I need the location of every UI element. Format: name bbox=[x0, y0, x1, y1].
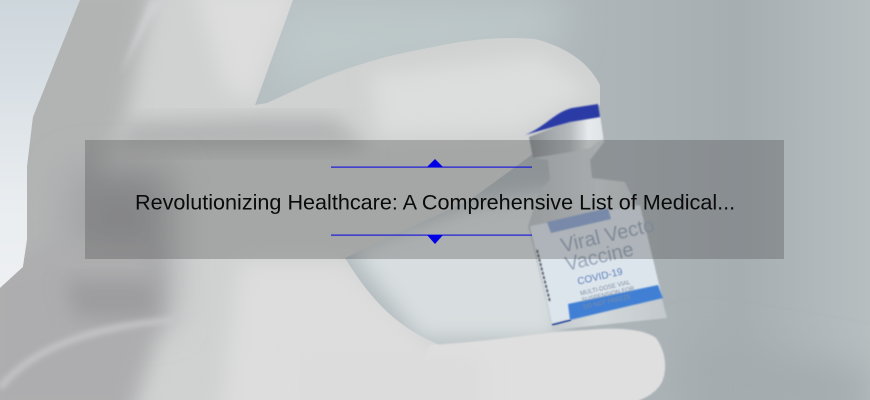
lower palm dark blob bbox=[65, 280, 155, 318]
vial blue cap bbox=[525, 104, 600, 135]
vial glass body bbox=[528, 118, 667, 330]
thumb bbox=[400, 329, 665, 400]
glove fold bbox=[0, 320, 180, 388]
knuckle shadow bbox=[110, 118, 370, 150]
label bottom blue line bbox=[552, 320, 571, 325]
outer finger shade bbox=[0, 0, 155, 300]
label blue stripe bbox=[568, 285, 663, 320]
label text bbox=[559, 214, 669, 313]
index finger light area bbox=[206, 0, 286, 90]
vial label bbox=[530, 205, 662, 323]
glove base silhouette bbox=[110, 0, 600, 400]
vial bbox=[525, 104, 669, 330]
label text: Vaccine bbox=[563, 239, 636, 276]
thumb blend bbox=[300, 355, 480, 400]
label blue tag bbox=[547, 208, 611, 233]
title text: Revolutionizing Healthcare: A Comprehensive List of Medical... bbox=[135, 190, 735, 214]
label text: DO NOT FREEZE bbox=[583, 294, 632, 311]
finger crease highlight bbox=[128, 2, 156, 57]
vial metal collar bbox=[529, 116, 603, 158]
label text: SUSPENSION FOR bbox=[581, 286, 636, 304]
left background sliver bbox=[0, 0, 82, 290]
fingertip light area bbox=[378, 62, 572, 129]
background shading bbox=[270, 0, 870, 400]
label text: COVID-19 bbox=[576, 267, 624, 288]
glove bbox=[0, 0, 600, 400]
dark title band bbox=[85, 140, 784, 259]
top divider bbox=[331, 159, 532, 168]
pale gap between fingers bbox=[350, 190, 560, 340]
palm dark shadow bbox=[70, 170, 170, 320]
vial left text edge bbox=[537, 250, 550, 302]
label text: Viral Vecto bbox=[559, 214, 657, 257]
lower palm left shade bbox=[0, 259, 166, 400]
label text: MULTI-DOSE VIAL bbox=[580, 280, 632, 297]
lower palm light area bbox=[226, 266, 424, 400]
bottom divider bbox=[331, 235, 532, 244]
